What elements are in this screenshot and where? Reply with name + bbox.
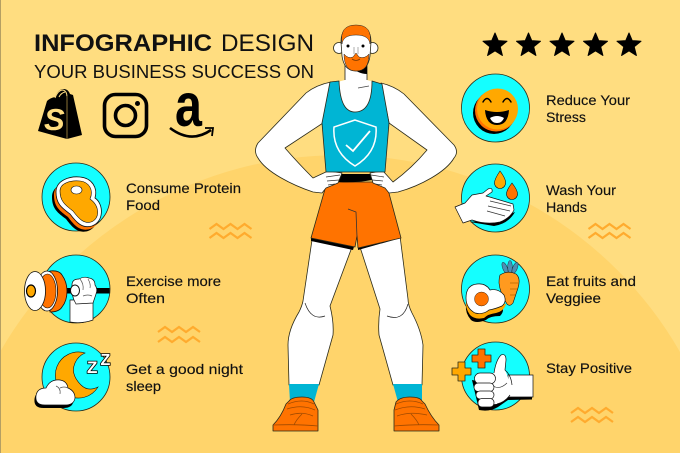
neck and chest: [326, 62, 386, 125]
label: reduce your stress: [546, 92, 630, 125]
label: reduce your stress: Stress: [546, 109, 586, 125]
icon: protein steak: [42, 163, 110, 232]
title: [34, 30, 314, 82]
label: wash your hands: [546, 182, 616, 215]
label: consume protein food: Food: [126, 197, 160, 213]
eyes and nose: [346, 44, 364, 60]
label: consume protein food: [126, 180, 241, 213]
right shoe: [394, 397, 439, 431]
left arm: [256, 82, 342, 193]
icon: exercise dumbbell: [24, 255, 110, 323]
icon: instagram: [104, 94, 146, 136]
icon: amazon: a: [175, 71, 203, 139]
socks: [289, 384, 422, 402]
zigzag decoration: right bottom: [571, 408, 613, 422]
shorts: [311, 182, 401, 248]
zigzag decoration: right top: [588, 224, 630, 238]
title: YOUR BUSINESS SUCCESS ON: [34, 61, 314, 82]
left shoe: [273, 397, 318, 431]
figure: man with shield tank top: [256, 25, 456, 431]
shorts seam: [348, 209, 357, 237]
label: eat fruits and veggiee: Veggiee: [546, 290, 601, 306]
face: [341, 26, 371, 71]
neck shadow: [350, 62, 367, 74]
icon: amazon: [170, 71, 213, 139]
hand finger lines: [326, 175, 384, 185]
beard: [344, 53, 369, 71]
label: wash your hands: Wash Your: [546, 182, 616, 198]
icon: thumbs up with plus signs: [452, 342, 533, 411]
right arm: [370, 83, 456, 193]
label: exercise more often: [126, 273, 221, 306]
icon: sleep moon and cloud: Z: [100, 352, 110, 369]
icon: happy face: [462, 74, 530, 142]
icon: sleep moon and cloud: [34, 343, 111, 411]
collar line: [358, 86, 369, 88]
label: get a good night sleep: Get a good night: [126, 361, 243, 377]
zigzag decoration: left top: [210, 224, 252, 238]
label: eat fruits and veggiee: Eat fruits and: [546, 273, 636, 289]
label: get a good night sleep: sleep: [126, 378, 161, 394]
label: exercise more often: Exercise more: [126, 273, 221, 289]
icon: shopify bag: S: [44, 102, 65, 137]
icon: shopify bag: [38, 89, 82, 139]
icon: egg and carrot: [462, 255, 530, 323]
ears: [334, 42, 378, 54]
label: consume protein food: Consume Protein: [126, 180, 241, 196]
tank top: [322, 81, 389, 172]
rating stars: [483, 33, 641, 56]
neck outline: [345, 62, 367, 80]
shorts lining: [311, 232, 401, 250]
title: INFOGRAPHIC: [34, 30, 212, 57]
belt: [337, 174, 373, 182]
label: stay positive: Stay Positive: [546, 360, 632, 376]
icon: wash hands: [455, 164, 530, 232]
label: get a good night sleep: [126, 361, 243, 394]
shield logo: [334, 120, 376, 166]
hair: [342, 25, 370, 44]
icon: sleep moon and cloud: Z: [87, 358, 97, 377]
label: wash your hands: Hands: [546, 199, 587, 215]
zigzag decoration: left bottom: [158, 327, 200, 342]
label: reduce your stress: Reduce Your: [546, 92, 630, 108]
label: exercise more often: Often: [126, 290, 165, 306]
title: DESIGN: [221, 30, 314, 57]
legs: [288, 236, 423, 385]
label: eat fruits and veggiee: [546, 273, 636, 306]
